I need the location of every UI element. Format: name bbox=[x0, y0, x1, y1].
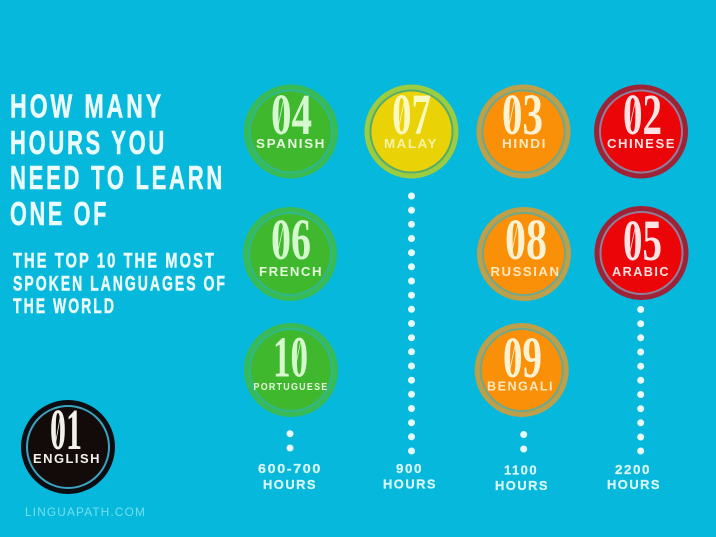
badge: 10 Portuguese: 10 bbox=[273, 324, 308, 390]
label: 900 hours: 900 bbox=[396, 461, 423, 476]
badge: 07 Malay: MALAY bbox=[384, 136, 438, 151]
badge: 01 English bbox=[21, 397, 115, 494]
label: 900 hours bbox=[383, 461, 437, 492]
subtitle bbox=[13, 250, 227, 318]
label: 900 hours: HOURS bbox=[383, 476, 437, 492]
label: 2200 hours: HOURS bbox=[607, 477, 661, 492]
badge: 09 Bengali bbox=[475, 323, 569, 417]
subtitle: THE WORLD bbox=[13, 295, 116, 318]
badge: 02 Chinese bbox=[594, 82, 688, 178]
badge: 03 Hindi: HINDI bbox=[502, 136, 547, 151]
badge: 08 Russian bbox=[477, 207, 571, 301]
credit: linguapath.com: LINGUAPATH.COM bbox=[25, 505, 146, 519]
badge: 07 Malay: 07 bbox=[392, 82, 431, 147]
title: HOURS YOU bbox=[10, 124, 167, 161]
label: 1100 hours: 1100 bbox=[504, 462, 538, 478]
subtitle: THE TOP 10 THE MOST bbox=[13, 250, 216, 272]
badge: 07 Malay bbox=[364, 82, 458, 178]
dots: 600-700 hours bbox=[286, 430, 294, 452]
dots: 1100 hours bbox=[520, 431, 527, 452]
badge: 03 Hindi bbox=[476, 82, 570, 178]
badge: 10 Portuguese bbox=[244, 323, 338, 417]
badge: 05 Arabic: ARABIC bbox=[612, 264, 670, 279]
badge: 06 French bbox=[243, 207, 337, 301]
label: 600-700 hours bbox=[258, 461, 322, 492]
label: 1100 hours: HOURS bbox=[495, 478, 549, 493]
title: ONE OF bbox=[10, 195, 109, 232]
dots: 900 hours bbox=[408, 192, 415, 454]
badge: 08 Russian: 08 bbox=[505, 207, 547, 272]
badge: 05 Arabic: 05 bbox=[623, 208, 662, 273]
badge: 04 Spanish bbox=[244, 82, 338, 178]
subtitle: SPOKEN LANGUAGES OF bbox=[13, 272, 227, 296]
label: 600-700 hours: HOURS bbox=[263, 477, 317, 492]
badge: 02 Chinese: CHINESE bbox=[607, 136, 676, 151]
badge: 06 French: 06 bbox=[271, 207, 311, 272]
title: NEED TO LEARN bbox=[10, 159, 225, 196]
title: HOW MANY bbox=[10, 88, 164, 124]
badge: 09 Bengali: BENGALI bbox=[487, 378, 554, 394]
badge: 06 French: FRENCH bbox=[259, 264, 323, 279]
badge: 04 Spanish: SPANISH bbox=[256, 136, 326, 151]
badge: 09 Bengali: 09 bbox=[503, 325, 542, 390]
label: 2200 hours: 2200 bbox=[615, 462, 651, 477]
badge: 02 Chinese: 02 bbox=[623, 82, 662, 147]
badge: 05 Arabic bbox=[594, 206, 688, 300]
badge: 08 Russian: RUSSIAN bbox=[490, 264, 560, 279]
title bbox=[10, 88, 225, 232]
badge: 04 Spanish: 04 bbox=[271, 82, 312, 147]
badge: 01 English: ENGLISH bbox=[33, 451, 101, 466]
label: 1100 hours bbox=[495, 462, 549, 493]
label: 2200 hours bbox=[607, 462, 661, 492]
badge: 03 Hindi: 03 bbox=[502, 82, 543, 147]
dots: 2200 hours bbox=[637, 306, 644, 454]
badge: 01 English: 01 bbox=[50, 397, 82, 462]
label: 600-700 hours: 600-700 bbox=[258, 461, 322, 476]
badge: 10 Portuguese: PORTUGUESE bbox=[254, 381, 328, 393]
